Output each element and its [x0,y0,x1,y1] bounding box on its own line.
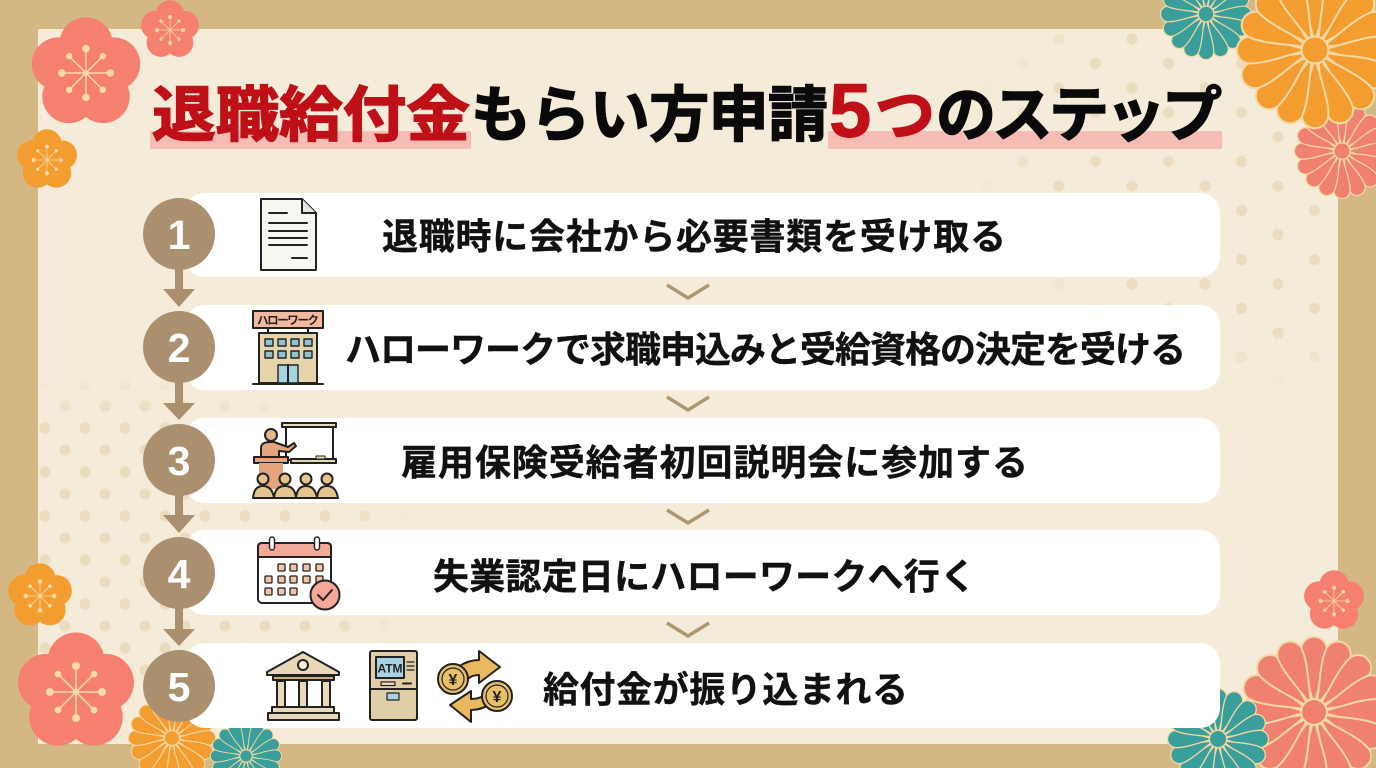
chevron 3 [667,510,709,523]
flower: orange plum lower left [8,563,72,625]
step bar 1 [185,193,1220,277]
flower: coral plum right [1304,570,1364,629]
flower: orange chrysanthemum top right [1237,0,1376,128]
icon: ATM [370,651,417,720]
number badge 4: 4 [168,551,191,597]
icon: Hello Work building [253,311,323,384]
flower: teal chrysanthemum top right [1160,0,1252,60]
flower: salmon chrysanthemum right [1294,103,1376,199]
number badge 5 [143,650,215,722]
step text 3: 雇用保険受給者初回説明会に参加する [401,434,1028,486]
arrow 2 to 3 [163,378,195,420]
number badge 2 [143,311,215,383]
title highlight right [828,131,1222,149]
title text: black part: もらい方申請 [471,67,828,154]
icon: calendar [258,537,340,610]
icon: yen transfer arrows: ¥ [449,672,458,689]
flower: large coral plum bottom left [18,632,134,746]
icon: document [261,199,316,270]
flower: teal chrysanthemum bottom [210,720,282,768]
arrow 4 to 5 [163,604,195,646]
step text 1: 退職時に会社から必要書類を受け取る [382,208,1006,260]
number badge 1 [143,198,215,270]
number badge 1: 1 [168,212,190,258]
icon: Hello Work building: ハローワーク [257,314,319,327]
step text 2: ハローワークで求職申込みと受給資格の決定を受ける [345,321,1186,373]
chevron 1 [667,285,709,298]
flower: small coral plum top [141,0,199,57]
step bar 2 [185,305,1220,390]
step text 4: 失業認定日にハローワークへ行く [433,548,976,600]
title text: red part: 退職給付金 [152,66,470,153]
flower: orange chrysanthemum bottom [128,694,216,768]
flower: large coral plum top left [32,17,140,123]
flower: orange plum left [17,129,77,188]
number badge 5: 5 [168,664,190,710]
chevron 4 [667,623,709,636]
step bar 3 [185,418,1220,503]
step text 5: 給付金が振り込まれる [543,661,908,713]
title text: tsu: つ [875,67,935,154]
icon: yen transfer arrows [438,651,512,722]
title highlight left [150,131,471,149]
icon: yen transfer arrows: ¥ [493,689,502,706]
step bar 5 [185,643,1220,728]
flower: salmon chrysanthemum bottom right [1239,637,1376,768]
flower: teal chrysanthemum bottom right [1168,689,1268,768]
title text: number 5: 5 [829,69,871,154]
number badge 3: 3 [168,438,190,484]
icon: bank [267,652,339,720]
step bar 4 [185,530,1220,615]
icon: presenter and audience [253,423,338,498]
arrow 3 to 4 [163,491,195,533]
title [150,66,1222,154]
number badge 4 [143,537,215,609]
number badge 3 [143,424,215,496]
title text: steps: のステップ [936,67,1222,154]
icon: ATM: ATM [377,662,403,676]
number badge 2: 2 [168,325,190,371]
chevron 2 [667,397,709,410]
arrow 1 to 2 [163,265,195,307]
